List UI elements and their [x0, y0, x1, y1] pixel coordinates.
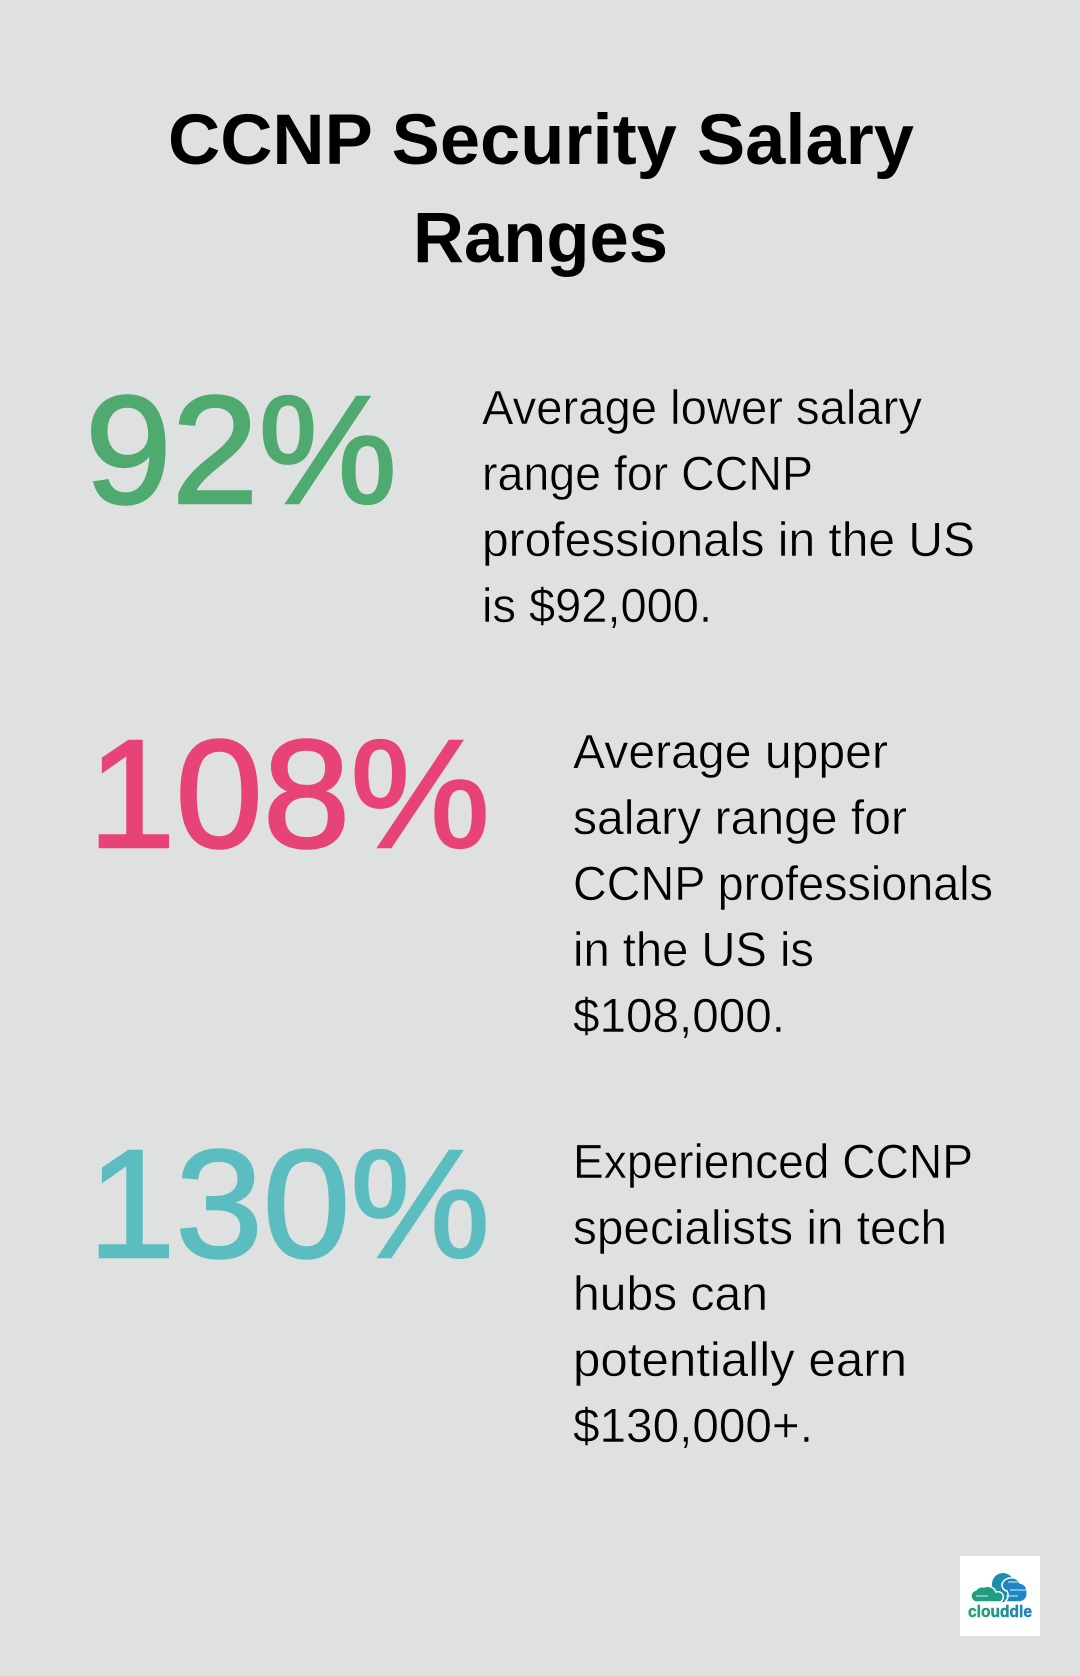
number: 108%: 108%: [88, 708, 490, 880]
description: 92%: professionals in the US: [482, 514, 975, 567]
description: 130%: [573, 1136, 973, 1453]
description: 92%: is $92,000.: [482, 580, 712, 633]
description: 130%: specialists in tech: [573, 1202, 947, 1255]
title: Ranges: [413, 199, 668, 278]
stat: 92%: [85, 364, 975, 633]
icon: clouds: [971, 1573, 1027, 1602]
description: 130%: $130,000+.: [573, 1400, 813, 1453]
description: 108%: in the US is: [573, 924, 814, 977]
description: 108%: Average upper: [573, 726, 888, 779]
description: 130%: hubs can: [573, 1268, 768, 1321]
description: 108%: [573, 726, 993, 1043]
description: 130%: Experienced CCNP: [573, 1136, 973, 1189]
description: 108%: salary range for: [573, 792, 907, 845]
description: 130%: potentially earn: [573, 1334, 907, 1387]
title: [168, 101, 915, 278]
stat: 108%: [88, 708, 993, 1043]
title: CCNP Security Salary: [168, 101, 915, 180]
logo: clouddle: [960, 1556, 1040, 1636]
number: 92%: 92%: [85, 364, 397, 536]
logo wordmark: clouddle: [968, 1602, 1032, 1621]
description: 92%: Average lower salary: [482, 382, 922, 435]
number: 130%: 130%: [88, 1118, 490, 1290]
description: 92%: [482, 382, 975, 633]
stat: 130%: [88, 1118, 973, 1453]
description: 92%: range for CCNP: [482, 448, 813, 501]
description: 108%: $108,000.: [573, 990, 785, 1043]
description: 108%: CCNP professionals: [573, 858, 993, 911]
